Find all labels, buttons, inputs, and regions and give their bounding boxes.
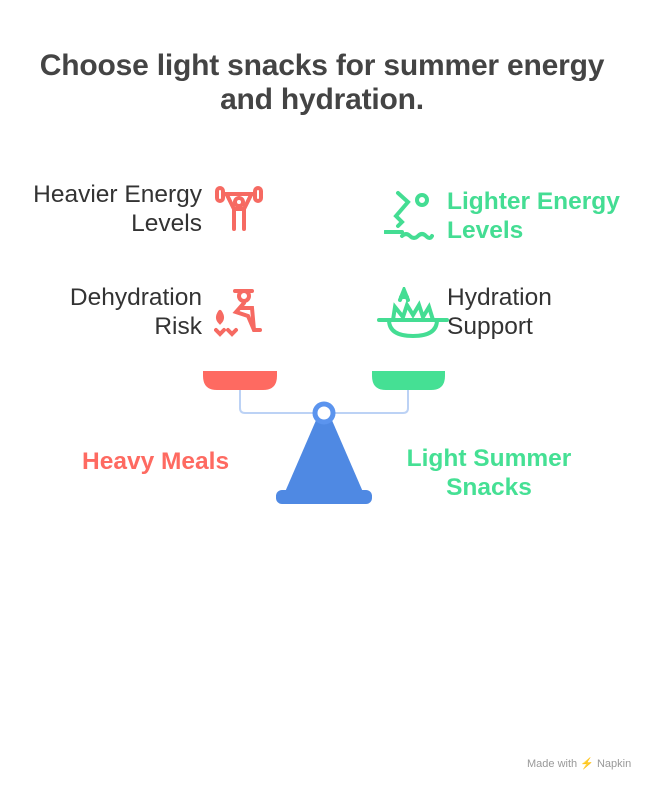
label: light summer snacks [407, 445, 571, 501]
footer: Made with ⚡ Napkin [527, 758, 631, 770]
icon: worker with drops [214, 289, 262, 337]
text: heavier energy levels: Heavier Energy [33, 181, 202, 208]
scale [203, 371, 445, 504]
text: dehydration risk: Risk [154, 313, 202, 340]
label: light summer snacks: Snacks [446, 474, 532, 501]
text: hydration support: Hydration [447, 284, 552, 311]
text: lighter energy levels [447, 188, 620, 244]
icon: diver [384, 190, 434, 240]
text: lighter energy levels: Levels [447, 217, 523, 244]
label: heavy meals: Heavy Meals [82, 448, 229, 475]
text: dehydration risk: Dehydration [70, 284, 202, 311]
text: dehydration risk [70, 284, 202, 340]
text: hydration support: Support [447, 313, 533, 340]
pivot [315, 404, 333, 422]
text: heavier energy levels [33, 181, 202, 237]
text: lighter energy levels: Lighter Energy [447, 188, 620, 215]
beam [240, 390, 408, 413]
title [40, 49, 604, 116]
right pan [372, 371, 445, 390]
title: Choose light snacks for summer energy [40, 49, 604, 82]
text: heavier energy levels: Levels [131, 210, 202, 237]
icon: salad bowl [377, 287, 449, 338]
label: light summer snacks: Light Summer [407, 445, 571, 472]
left pan [203, 371, 277, 390]
icon: weightlifter [215, 186, 263, 231]
text: hydration support [447, 284, 552, 340]
base [276, 418, 372, 504]
title: and hydration. [220, 83, 424, 116]
